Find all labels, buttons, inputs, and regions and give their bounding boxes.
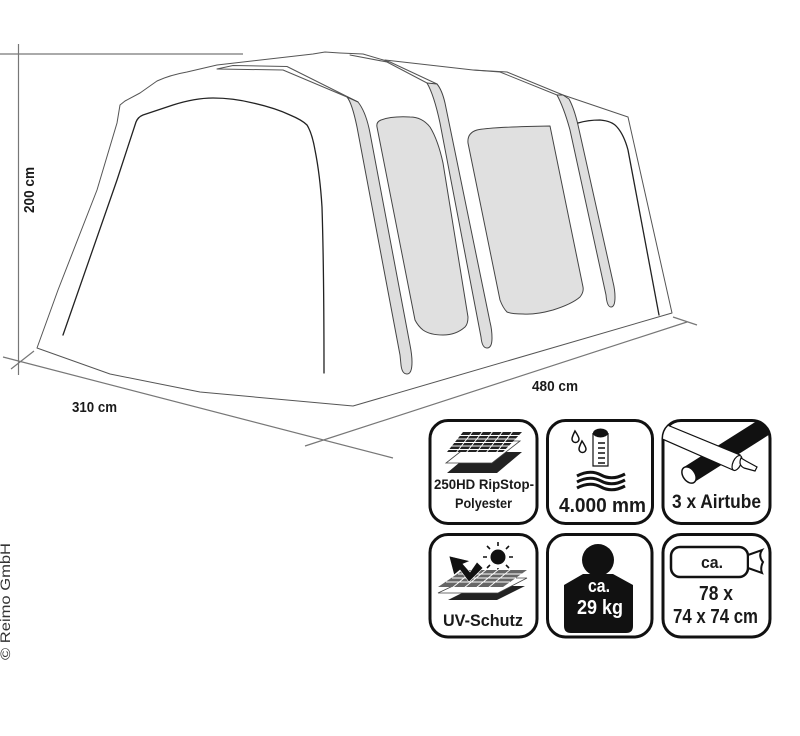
panel: pack size: 78 x — [699, 583, 733, 605]
icon: weight — [564, 544, 633, 633]
icon: waves — [577, 472, 625, 490]
panel: fabric — [430, 420, 537, 524]
panel: UV protection — [430, 534, 537, 637]
tent ridge lines — [217, 53, 557, 102]
label: width: 480 cm — [532, 378, 578, 395]
text: 4.000 mm — [559, 495, 646, 517]
icon: arrow — [449, 556, 483, 582]
text: 250HD RipStop- — [434, 476, 534, 492]
panel: water column — [548, 420, 652, 524]
icon: tubes — [663, 422, 768, 484]
label: depth: 310 cm — [72, 399, 117, 416]
panel: airtube — [660, 419, 775, 524]
dimension lines — [0, 44, 697, 458]
text: 3 x Airtube — [672, 492, 761, 513]
icon: mesh layers — [446, 431, 522, 473]
icon: mesh layers — [438, 569, 527, 600]
front door — [63, 98, 324, 373]
icon: sun — [483, 542, 513, 572]
panel: weight — [548, 534, 652, 637]
text: ca. — [701, 553, 723, 572]
rear door — [578, 120, 659, 315]
airtube 1 — [347, 97, 412, 374]
label: height: 200 cm — [21, 167, 38, 213]
tent outline — [37, 52, 672, 406]
panel: pack size: 74 x 74 cm — [673, 606, 758, 628]
tent drawing — [37, 52, 672, 406]
window 1 — [377, 117, 468, 335]
airtube 2 — [427, 83, 492, 348]
text: ca. — [588, 576, 610, 596]
icon: drops — [572, 431, 586, 453]
panel: weight: 29 kg — [577, 597, 623, 619]
panel: pack size — [663, 534, 770, 637]
text: UV-Schutz — [443, 611, 523, 630]
icon: bag — [671, 547, 763, 577]
panel: fabric: Polyester — [455, 495, 512, 511]
icon: measuring cylinder — [593, 428, 608, 466]
window 2 — [468, 126, 583, 314]
airtube 3 — [557, 95, 615, 307]
